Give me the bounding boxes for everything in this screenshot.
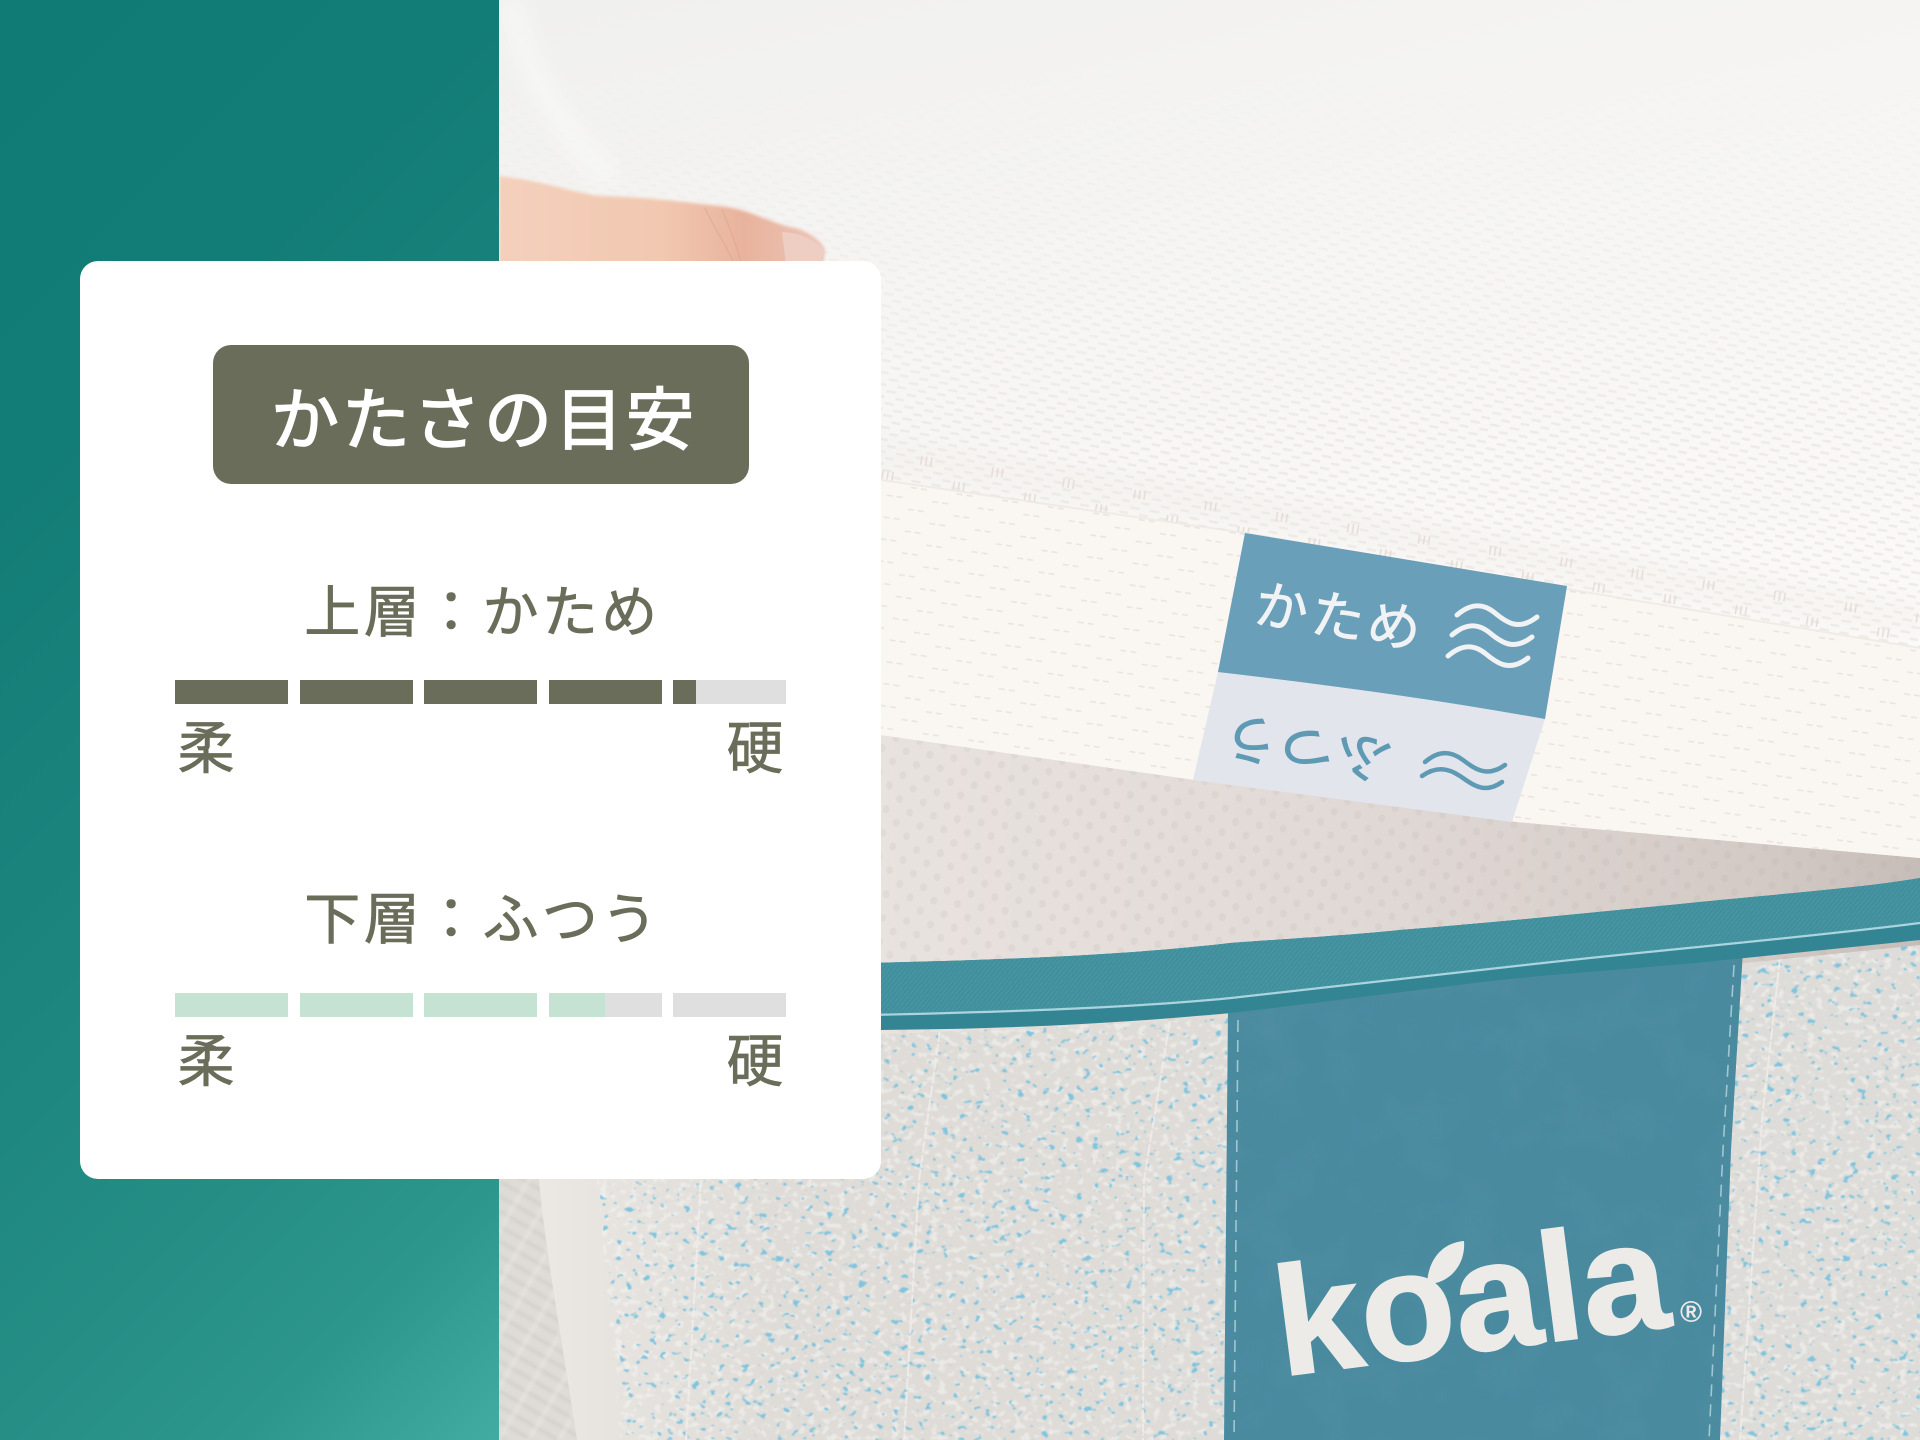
text: lower layer regular: 下層：ふつう	[304, 888, 661, 951]
panel: teal gradient background	[0, 0, 499, 1440]
logo leaf	[1427, 1241, 1464, 1284]
label: hard lower: 硬	[726, 1030, 784, 1094]
mattress top surface	[499, 0, 1920, 858]
segment 1	[175, 680, 288, 704]
segment 3	[424, 680, 537, 704]
quilted fabric of the case	[530, 930, 1920, 1440]
segment 4	[548, 680, 662, 704]
scale bar: lower layer	[175, 993, 786, 1017]
logo registered mark: ®	[1680, 1296, 1702, 1329]
icon: two waves	[1422, 753, 1505, 788]
label: hard upper: 硬	[726, 717, 784, 781]
label: soft upper: 柔	[178, 717, 234, 781]
carpet floor	[499, 1179, 577, 1440]
segment 3	[424, 993, 537, 1017]
label: soft lower: 柔	[178, 1030, 234, 1094]
segment 2	[300, 993, 412, 1017]
segment 2	[300, 680, 412, 704]
heading: firmness guide	[213, 345, 749, 484]
segment 4 partial	[548, 993, 662, 1017]
segment 1	[175, 993, 288, 1017]
scale bar: upper layer	[175, 680, 786, 704]
shadowed mesh under the mattress	[881, 735, 1920, 1034]
label text: firm: かため	[1251, 576, 1429, 661]
teal suede tag with koala logo	[1224, 950, 1743, 1440]
icon: three waves	[1448, 606, 1537, 666]
hand pressing the mattress	[499, 176, 825, 265]
text: upper layer firm: 上層：かため	[304, 581, 661, 644]
logo wordmark: koala	[1264, 1188, 1678, 1409]
teal piping along case edge	[870, 878, 1920, 1030]
label text: regular, upside down: ふつう	[1217, 704, 1395, 790]
photo: mattress with label and koala case	[499, 0, 1920, 1440]
photo content	[499, 0, 1920, 1440]
heading: firmness guide: かたさの目安	[271, 383, 697, 459]
segment 5 partial	[673, 680, 786, 704]
segment 5	[673, 993, 786, 1017]
fold label on mattress	[1193, 533, 1567, 822]
panel: firmness card	[80, 261, 881, 1179]
mattress side band	[881, 445, 1920, 858]
